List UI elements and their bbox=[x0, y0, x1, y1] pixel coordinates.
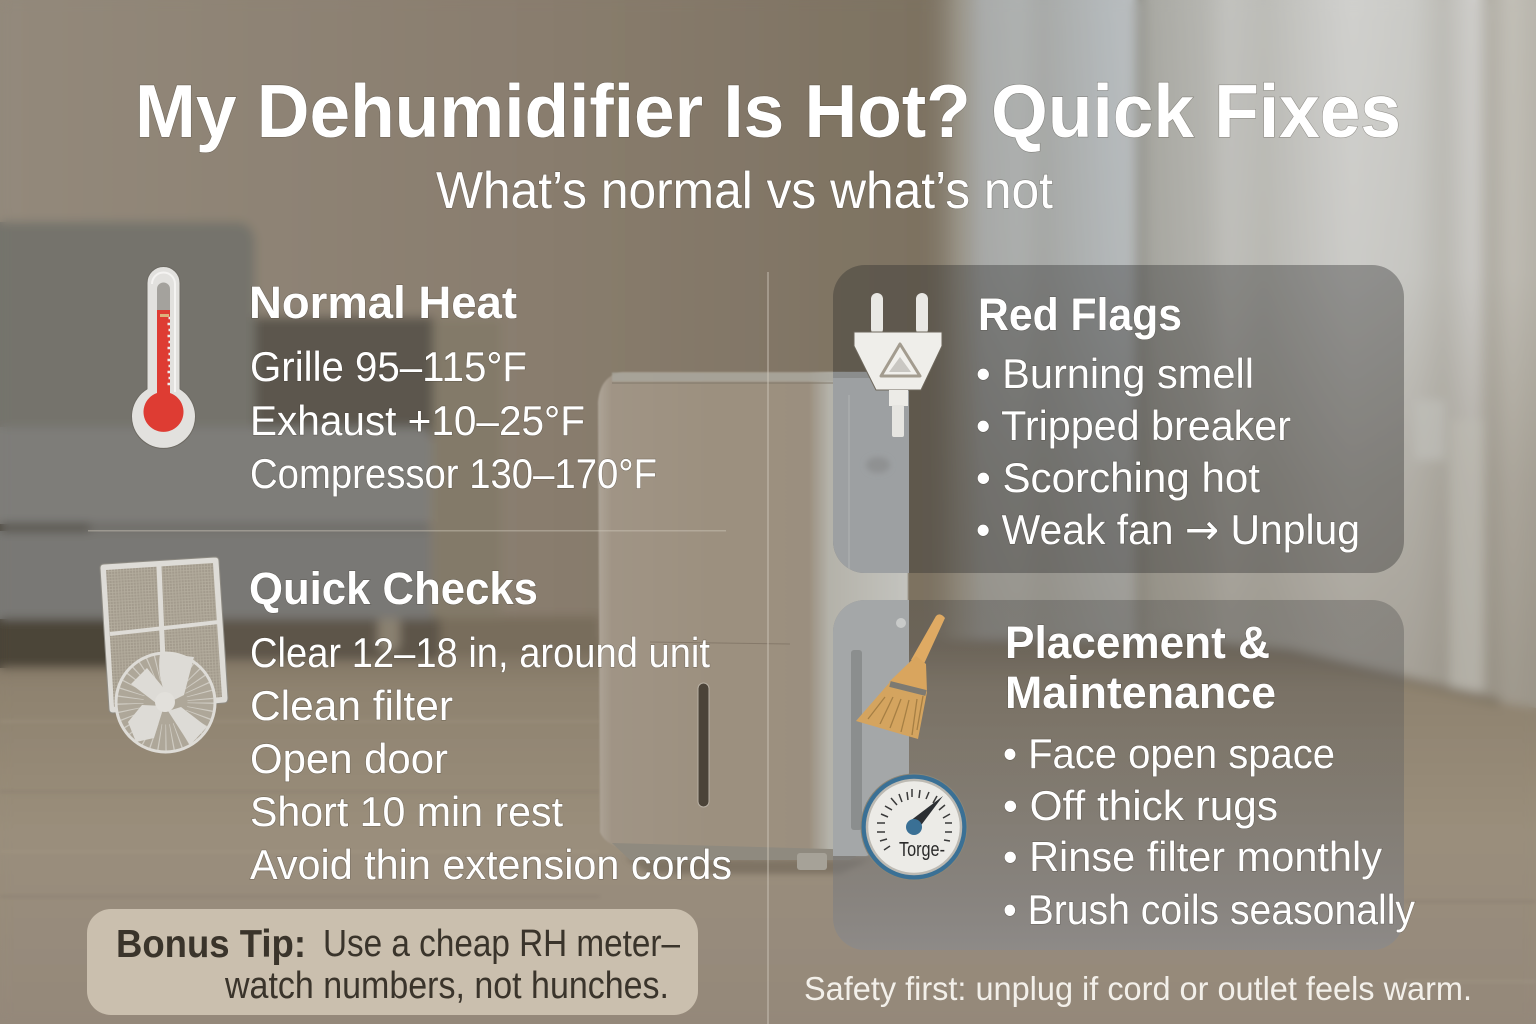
callout: bonus tip bbox=[87, 909, 698, 1015]
heading: placement and maintenance bbox=[1005, 617, 1276, 718]
quick checks list: Clear 12–18 in, around unit bbox=[250, 629, 710, 676]
normal heat list bbox=[250, 343, 657, 497]
normal heat list: Grille 95–115°F bbox=[250, 343, 527, 390]
subtitle: What’s normal vs what’s not bbox=[436, 162, 1054, 220]
dehumidifier unit bbox=[598, 372, 908, 874]
placement list: • Face open space bbox=[1003, 730, 1335, 777]
icon: air filter and fan bbox=[100, 557, 228, 752]
icon: thermometer bbox=[132, 266, 196, 448]
callout: bonus tip: Bonus Tip: bbox=[116, 923, 306, 966]
callout: bonus tip: Use a cheap RH meter– bbox=[323, 923, 681, 965]
red flags list: • Burning smell bbox=[976, 350, 1254, 397]
quick checks list: Short 10 min rest bbox=[250, 788, 563, 835]
placement list: • Brush coils seasonally bbox=[1003, 886, 1415, 933]
normal heat list: Exhaust +10–25°F bbox=[250, 397, 585, 444]
quick checks list: Avoid thin extension cords bbox=[250, 841, 732, 888]
heading: placement and maintenance: Placement & bbox=[1005, 617, 1270, 668]
floor plank texture bbox=[0, 720, 1536, 983]
normal heat list: Compressor 130–170°F bbox=[250, 450, 657, 497]
placement list: • Off thick rugs bbox=[1003, 782, 1278, 829]
panel: quick checks bbox=[249, 563, 732, 888]
panel: red flags bbox=[833, 265, 1404, 573]
heading: red flags: Red Flags bbox=[978, 289, 1182, 340]
title: My Dehumidifier Is Hot? Quick Fixes bbox=[135, 69, 1401, 153]
icon: gauge: Torge- bbox=[899, 839, 945, 861]
safety footnote: Safety first: unplug if cord or outlet feels warm. bbox=[804, 970, 1472, 1007]
heading: normal heat: Normal Heat bbox=[249, 277, 517, 328]
panel: normal heat bbox=[249, 277, 657, 497]
icon: broom bbox=[856, 614, 945, 739]
red flags list: • Scorching hot bbox=[976, 454, 1260, 501]
placement list bbox=[1003, 730, 1415, 933]
icon: plug with warning triangle bbox=[854, 293, 942, 437]
callout: bonus tip: watch numbers, not hunches. bbox=[224, 965, 669, 1007]
icon: gauge bbox=[861, 774, 967, 880]
quick checks list: Open door bbox=[250, 735, 448, 782]
red flags list: • Tripped breaker bbox=[976, 402, 1291, 449]
quick checks list: Clean filter bbox=[250, 682, 453, 729]
placement list: • Rinse filter monthly bbox=[1003, 833, 1382, 880]
panel: placement and maintenance bbox=[833, 600, 1415, 950]
heading: placement and maintenance: Maintenance bbox=[1005, 667, 1276, 718]
red flags list bbox=[976, 350, 1360, 554]
quick checks list bbox=[250, 629, 732, 888]
heading: quick checks: Quick Checks bbox=[249, 563, 538, 614]
divider lines bbox=[88, 272, 769, 1024]
red flags list: • Weak fan → Unplug bbox=[976, 505, 1360, 554]
